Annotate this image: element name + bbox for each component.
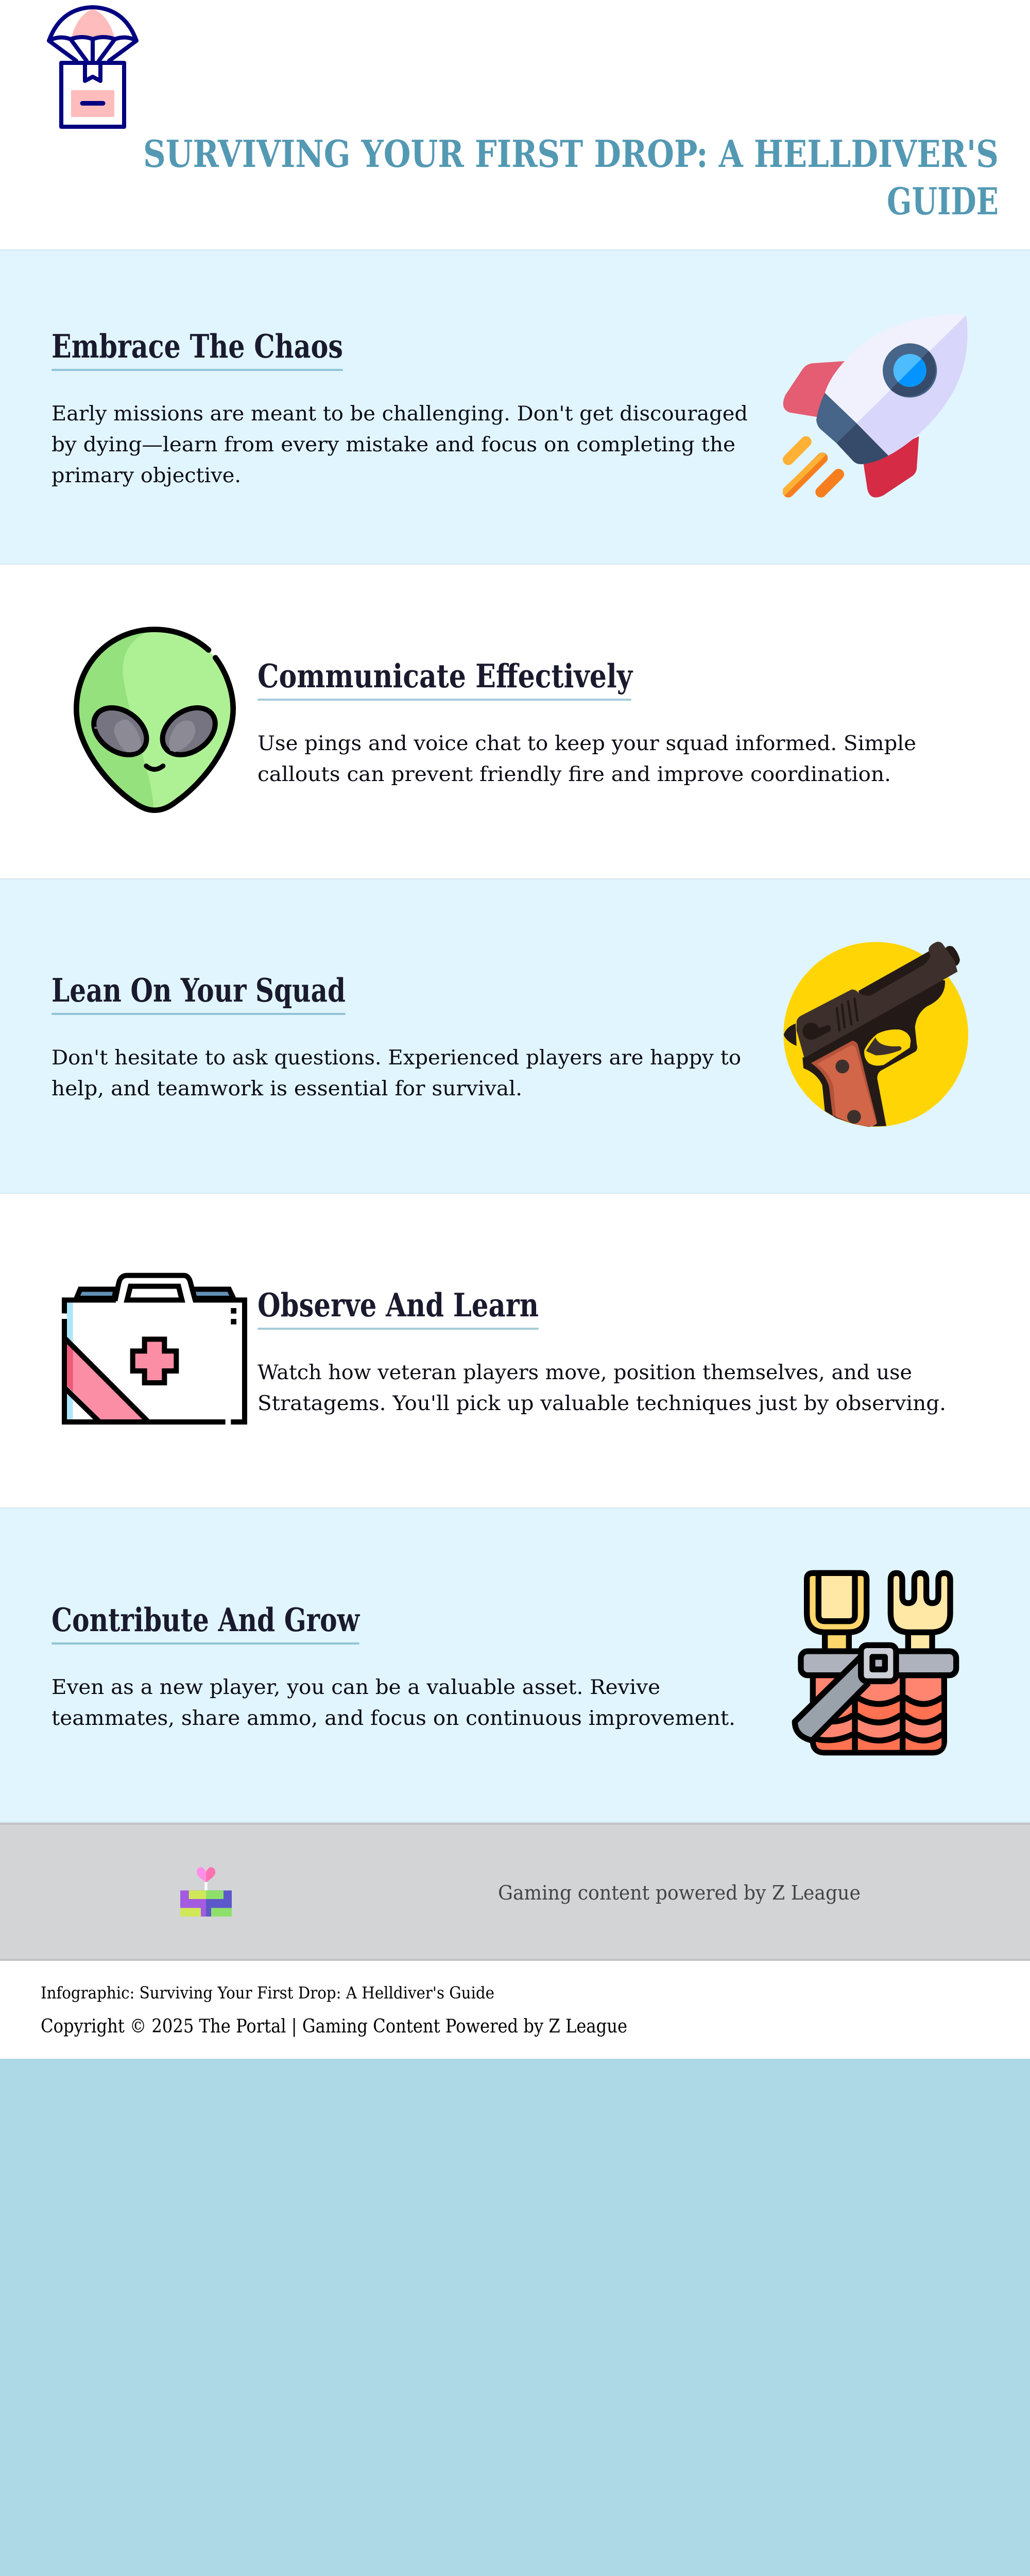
icon: sponsor logo xyxy=(180,1867,232,1917)
heading: observe and learn: Observe And Learn xyxy=(258,1286,539,1324)
text block: embrace the chaos: Early missions are meant to be challenging. Don't get discouraged xyxy=(52,402,748,426)
text block: observe and learn: Stratagems. You'll pick up valuable techniques just by observing. xyxy=(258,1392,946,1415)
text: copyright: Copyright © 2025 The Portal | Gaming Content Powered by Z League xyxy=(41,2016,627,2037)
text block: lean on your squad xyxy=(52,1046,741,1100)
heading: embrace the chaos: Embrace The Chaos xyxy=(52,327,343,365)
text block: communicate effectively: Use pings and voice chat to keep your squad informed. Simple xyxy=(258,732,916,755)
text: infographic credit: Infographic: Surviving Your First Drop: A Helldiver's Guide xyxy=(41,1983,494,2003)
heading: lean on your squad: Lean On Your Squad xyxy=(52,971,346,1009)
icon: rocket xyxy=(783,315,968,498)
heading: contribute and grow: Contribute And Grow xyxy=(52,1601,360,1639)
text block: observe and learn: Watch how veteran players move, position themselves, and use xyxy=(258,1361,912,1384)
panel: contribute and grow xyxy=(0,1509,1030,1822)
icon: medical kit xyxy=(64,1276,245,1422)
panel: footer xyxy=(0,1961,1030,2059)
text block: observe and learn xyxy=(258,1361,946,1415)
text block: contribute and grow xyxy=(52,1676,735,1730)
panel: embrace the chaos xyxy=(0,250,1030,564)
icon: alien head xyxy=(76,630,233,810)
title: GUIDE xyxy=(887,179,999,223)
icon: parachute crate xyxy=(49,7,136,127)
panel: communicate effectively xyxy=(0,565,1030,878)
text block: embrace the chaos: by dying—learn from every mistake and focus on completing the xyxy=(52,433,735,456)
text block: communicate effectively xyxy=(258,732,916,786)
panel: observe and learn xyxy=(0,1194,1030,1507)
text block: lean on your squad: Don't hesitate to ask questions. Experienced players are happy to xyxy=(52,1046,741,1070)
panel: lean on your squad xyxy=(0,879,1030,1193)
title xyxy=(143,132,999,223)
text block: contribute and grow: teammates, share ammo, and focus on continuous improvement. xyxy=(52,1707,735,1730)
icon: tool belt xyxy=(795,1573,956,1753)
icon: pistol xyxy=(783,942,968,1127)
panel: header xyxy=(0,0,1030,249)
text block: embrace the chaos: primary objective. xyxy=(52,464,241,487)
text: sponsor line: Gaming content powered by Z League xyxy=(498,1882,861,1904)
text block: communicate effectively: callouts can prevent friendly fire and improve coordination. xyxy=(258,763,891,786)
text block: lean on your squad: help, and teamwork is essential for survival. xyxy=(52,1077,522,1100)
panel: sponsor band xyxy=(0,1823,1030,1961)
text block: embrace the chaos xyxy=(52,402,748,487)
text block: contribute and grow: Even as a new player, you can be a valuable asset. Revive xyxy=(52,1676,660,1699)
heading: communicate effectively: Communicate Effectively xyxy=(258,657,633,695)
